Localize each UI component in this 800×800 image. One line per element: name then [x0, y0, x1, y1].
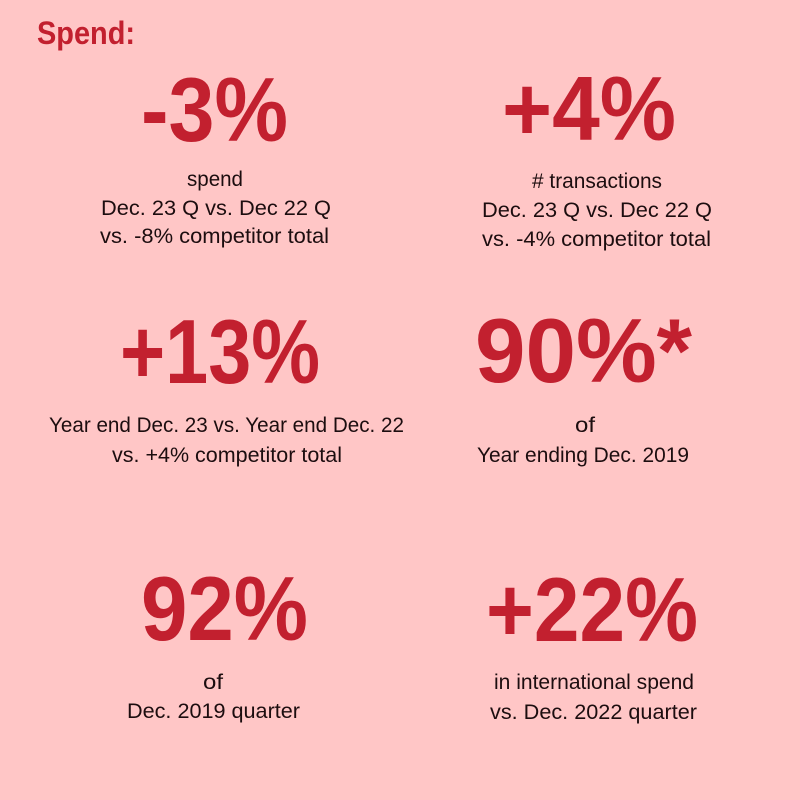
stat: 92% of quarter: of [203, 670, 223, 694]
stat: -3% spend: spend [187, 167, 243, 191]
stat: -3% spend: -3% [141, 60, 288, 161]
stat: +13% year end: vs. +4% competitor total [112, 443, 342, 467]
stat: +22% international spend: in international spend [494, 670, 694, 694]
stat: +4% transactions: # transactions [532, 169, 662, 193]
stat: +13% year end: +13% [120, 302, 320, 403]
stat: +4% transactions [482, 59, 712, 251]
stat: 90%* of year ending [475, 301, 693, 467]
stat: +4% transactions: vs. -4% competitor total [482, 227, 711, 251]
stat: -3% spend [100, 60, 331, 248]
stat: +13% year end [49, 302, 404, 467]
title: Spend: [37, 15, 135, 51]
stat: -3% spend: vs. -8% competitor total [100, 224, 329, 248]
stat: +22% international spend [486, 560, 698, 724]
stat: 90%* of year ending: Year ending Dec. 2019 [477, 443, 689, 467]
stat: +22% international spend: +22% [486, 560, 698, 661]
stat: -3% spend: Dec. 23 Q vs. Dec 22 Q [101, 196, 331, 220]
stat: 92% of quarter [127, 559, 308, 723]
stat: +22% international spend: vs. Dec. 2022 quarter [490, 700, 697, 724]
stat: 92% of quarter: Dec. 2019 quarter [127, 699, 300, 723]
stat: 90%* of year ending: of [575, 413, 595, 437]
stat: +4% transactions: Dec. 23 Q vs. Dec 22 Q [482, 198, 712, 222]
stat: 92% of quarter: 92% [141, 559, 308, 660]
stat: +13% year end: Year end Dec. 23 vs. Year end Dec. 22 [49, 413, 404, 437]
stat: 90%* of year ending: 90%* [475, 301, 693, 402]
stat: +4% transactions: +4% [502, 59, 676, 160]
